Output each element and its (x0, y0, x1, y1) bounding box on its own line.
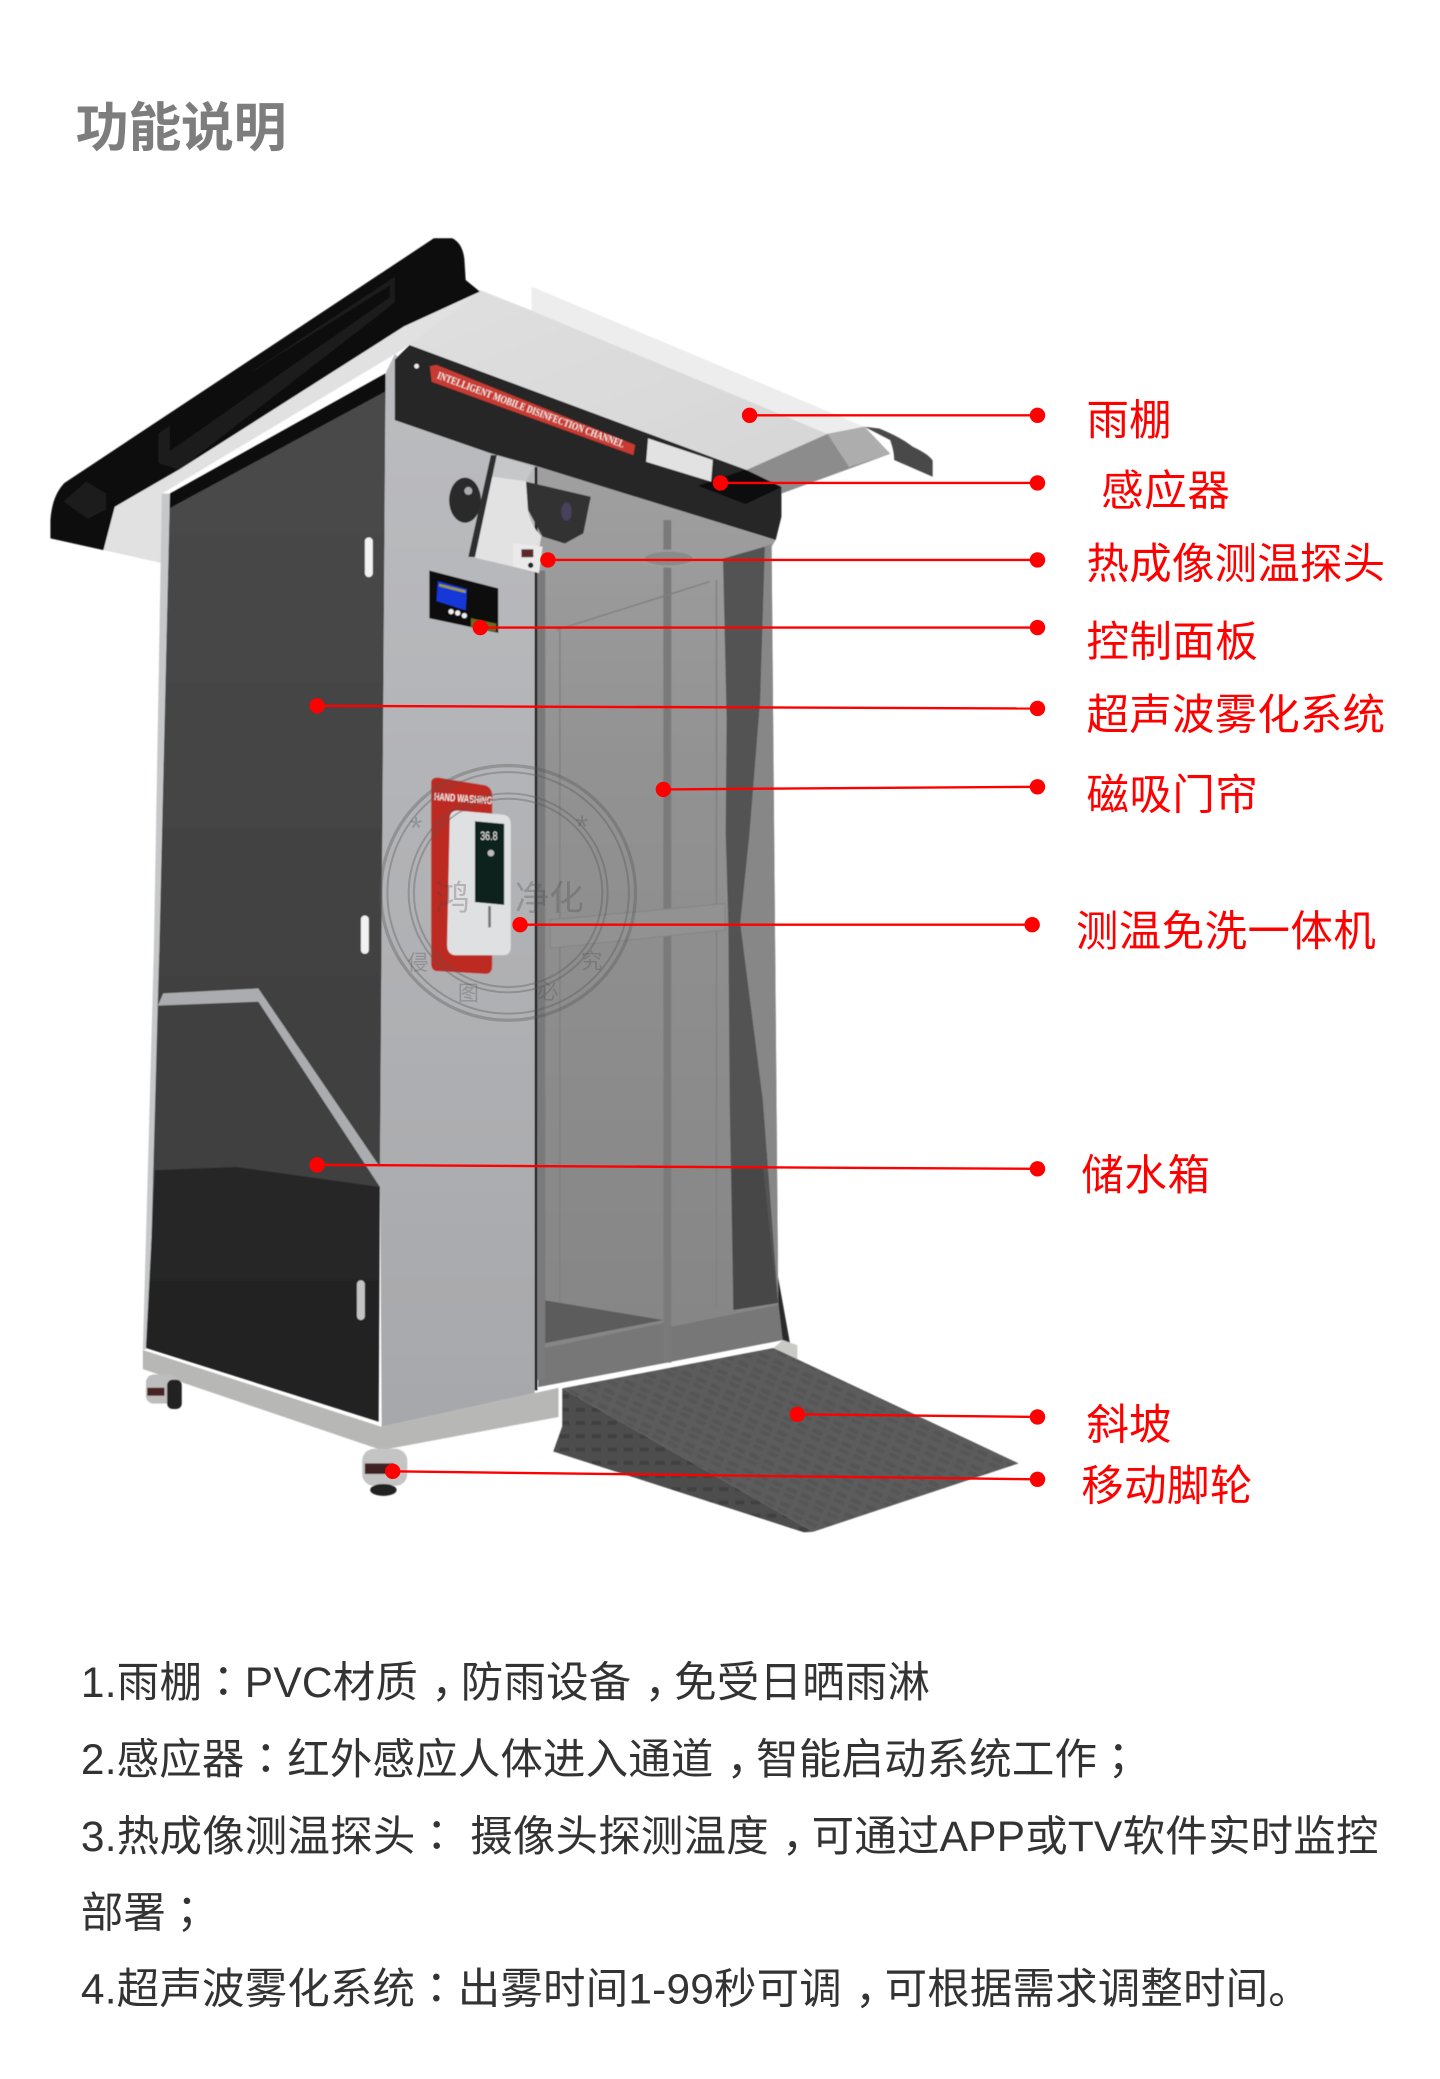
callout leader lines (309, 408, 1045, 1487)
watermark stamp: 鸿 (435, 880, 470, 918)
side grey panel (380, 354, 535, 1427)
leader: 储水箱 (309, 1157, 1045, 1177)
leader: 移动脚轮 (385, 1464, 1045, 1487)
watermark stamp: 图 (458, 982, 479, 1005)
watermark stamp: 侵 (407, 951, 429, 975)
leader: 控制面板 (473, 620, 1045, 635)
black roof edge (50, 238, 480, 550)
control panel (429, 571, 498, 633)
door centre stile (663, 520, 671, 1363)
thermometer dispenser: 36.8 (480, 829, 498, 843)
label: 移动脚轮: 移动脚轮 (1081, 1463, 1252, 1510)
roof panel (379, 287, 933, 494)
label: 超声波雾化系统: 超声波雾化系统 (1087, 692, 1385, 739)
watermark stamp: 必 (537, 980, 559, 1004)
camera (449, 455, 591, 573)
leader: 热成像测温探头 (540, 552, 1045, 568)
leader: 斜坡 (790, 1407, 1045, 1425)
door panel (148, 373, 386, 1250)
roof underside strip (103, 292, 480, 563)
watermark stamp (381, 766, 635, 1020)
watermark stamp: 净化 (515, 880, 584, 918)
door top strip (170, 373, 386, 508)
item 2: 2.感应器：红外感应人体进入通道 ，智能启动系统工作； (81, 1726, 1140, 1787)
label: 储水箱: 储水箱 (1081, 1152, 1210, 1199)
leader: 感应器 (713, 475, 1045, 491)
label: 测温免洗一体机: 测温免洗一体机 (1076, 908, 1376, 955)
watermark stamp: 究 (581, 950, 602, 974)
item 1: 1.雨棚：PVC材质 ，防雨设备 ，免受日晒雨淋 (81, 1649, 930, 1710)
item 3 second line: 部署； (81, 1880, 208, 1941)
leader: 超声波雾化系统 (309, 698, 1045, 716)
floor (543, 1300, 663, 1343)
water tank panel (146, 1167, 380, 1422)
label: 控制面板: 控制面板 (1087, 619, 1258, 666)
door handles (357, 537, 373, 1320)
callout labels (1076, 397, 1385, 1510)
item 4: 4.超声波雾化系统：出雾时间1-99秒可调 ，可根据需求调整时间。 (81, 1955, 1311, 2016)
thermometer dispenser (447, 811, 511, 955)
ramp (553, 1348, 1019, 1532)
tank outline (158, 988, 380, 1187)
label: 感应器: 感应器 (1101, 468, 1230, 515)
door frame lines (557, 580, 716, 1307)
leader: 雨棚 (742, 408, 1045, 423)
ceiling fitting (643, 551, 694, 567)
product illustration: disinfection channel (50, 238, 1019, 1532)
label: 磁吸门帘: 磁吸门帘 (1087, 771, 1258, 818)
caster wheels (146, 1374, 407, 1496)
sensor box (646, 438, 713, 482)
hand washing plate (431, 777, 493, 974)
red banner: INTELLIGENT MOBILE DISINFECTION CHANNEL (435, 371, 626, 451)
base frame (143, 1350, 559, 1450)
interior side wall (723, 547, 778, 1310)
watermark stamp: * (410, 810, 422, 846)
leader: 磁吸门帘 (656, 779, 1045, 797)
label: 雨棚: 雨棚 (1087, 397, 1171, 444)
watermark stamp: * (576, 808, 588, 844)
item 3 first line: 3.热成像测温探头： 摄像头探测温度 ，可通过APP或TV软件实时监控 (81, 1803, 1378, 1864)
leader: 测温免洗一体机 (512, 917, 1040, 932)
label: 热成像测温探头: 热成像测温探头 (1087, 540, 1385, 587)
title: 功能说明 (76, 99, 287, 158)
door edge (535, 467, 537, 1390)
description text (81, 1649, 1378, 2016)
top black header (395, 345, 781, 540)
hand washing plate: HAND WASHING (434, 791, 493, 807)
left frame edge (143, 494, 170, 1350)
outer black sliver (777, 1274, 790, 1343)
doorway glass (535, 464, 783, 1387)
rail band (550, 904, 725, 948)
door kick plates (538, 1323, 670, 1387)
label: 斜坡: 斜坡 (1087, 1402, 1171, 1449)
red banner (430, 365, 635, 455)
